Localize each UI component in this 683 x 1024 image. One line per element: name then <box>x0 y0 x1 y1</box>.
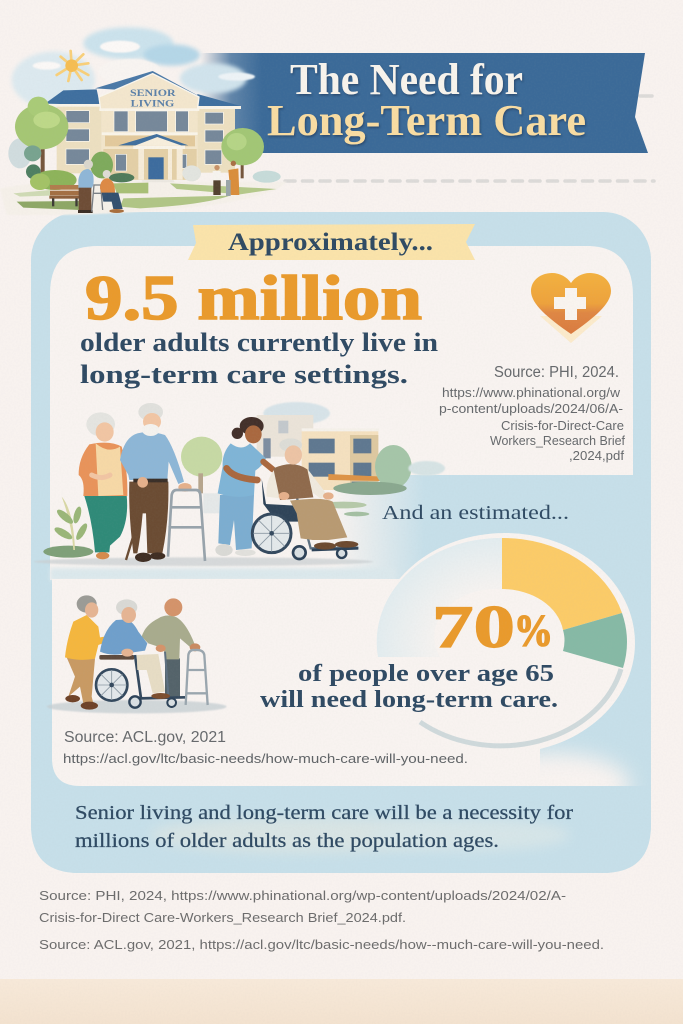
label: and an estimated: And an estimated... <box>382 502 569 524</box>
statement: people over 65: will need long-term care. <box>260 687 558 713</box>
building wings and roof <box>45 71 241 180</box>
source: ACL: https://acl.gov/ltc/basic-needs/how-much-care-will-you-need. <box>63 751 468 766</box>
source: PHI: ,2024,pdf <box>569 449 625 463</box>
person: nurse <box>215 417 273 556</box>
illustration: three seniors with wheelchair <box>47 595 227 713</box>
statement: people over 65 <box>260 661 558 713</box>
main blue panel <box>31 212 651 873</box>
building windows <box>66 111 223 171</box>
illustration: caregivers and seniors <box>33 402 445 566</box>
person: seated man and wheelchair <box>96 599 185 708</box>
source: PHI <box>439 364 626 463</box>
person: woman in orange cardigan <box>79 412 127 559</box>
green segment <box>563 613 627 668</box>
illustration: senior living building <box>0 27 287 215</box>
person: man with cane <box>120 403 192 562</box>
bottom tan band <box>0 979 683 1024</box>
yellow segment <box>502 538 622 630</box>
source: PHI: p-content/uploads/2024/06/A- <box>439 402 623 416</box>
upper white card <box>50 246 633 580</box>
value: 70 <box>432 594 515 660</box>
title line one: The Need for <box>290 55 523 104</box>
far couple <box>213 161 239 196</box>
big number: 9.5 million: 9.5 million <box>85 262 422 333</box>
person: woman in yellow <box>65 595 112 710</box>
walker <box>168 490 205 561</box>
ribbon label: Approximately... <box>228 229 433 256</box>
pale remaining ring <box>377 538 502 657</box>
statement: older adults: older adults currently live in <box>80 328 439 357</box>
sign: senior living <box>130 89 176 109</box>
building entrance <box>118 134 188 191</box>
ground shadow <box>47 700 227 713</box>
conclusion text: Senior living and long-term care will be a necessity for <box>75 802 573 824</box>
lower card fade <box>480 753 630 817</box>
footer sources <box>39 888 604 952</box>
source: PHI: Crisis-for-Direct-Care <box>501 419 624 433</box>
chart background circle <box>375 533 635 753</box>
banner ribbon <box>200 53 648 153</box>
senior couple <box>78 160 124 213</box>
grey arc <box>420 669 621 746</box>
source: PHI: https://www.phinational.org/w <box>442 386 621 400</box>
source: PHI: Source: PHI, 2024. <box>494 364 619 381</box>
scene watercolor wash <box>50 474 435 581</box>
source: ACL <box>63 729 468 766</box>
footer sources: Source: PHI, 2024, https://www.phinational.org/wp-content/uploads/2024/02/A- <box>39 888 566 903</box>
title line two: Long-Term Care <box>267 96 586 145</box>
donut chart: 70 percent <box>375 533 635 753</box>
statement: older adults <box>80 328 439 389</box>
approximately ribbon <box>188 224 475 260</box>
source: PHI: Workers_Research Brief <box>490 434 626 448</box>
ground and lawn <box>0 180 287 215</box>
ground shadow <box>33 557 373 566</box>
trees <box>8 97 281 190</box>
statement: people over 65: of people over age 65 <box>298 661 554 687</box>
footer sources: Crisis-for-Direct Care-Workers_Research Brief_2024.pdf. <box>39 910 406 925</box>
conclusion text: millions of older adults as the population ages. <box>75 830 499 852</box>
background buildings and trees <box>181 402 445 516</box>
statement: older adults: long-term care settings. <box>80 360 408 389</box>
sign: senior living: LIVING <box>131 99 174 109</box>
title banner <box>200 53 648 153</box>
header dashed divider <box>285 96 654 181</box>
person: man in wheelchair <box>252 438 358 559</box>
icon: sun <box>57 51 88 81</box>
conclusion text <box>75 802 573 852</box>
person: man standing with walker <box>142 598 208 705</box>
sign: senior living: SENIOR <box>130 89 176 99</box>
footer sources: Source: ACL.gov, 2021, https://acl.gov/ltc/basic-needs/how--much-care-will-you-need. <box>39 937 604 952</box>
source: ACL: Source: ACL.gov, 2021 <box>64 729 226 746</box>
conclusion band <box>31 786 651 873</box>
icon: heart with cross <box>531 273 611 343</box>
bench <box>49 185 80 206</box>
sky and clouds <box>12 27 255 108</box>
lower white card <box>52 579 540 786</box>
percent sign: % <box>514 606 553 655</box>
plant <box>43 497 93 558</box>
